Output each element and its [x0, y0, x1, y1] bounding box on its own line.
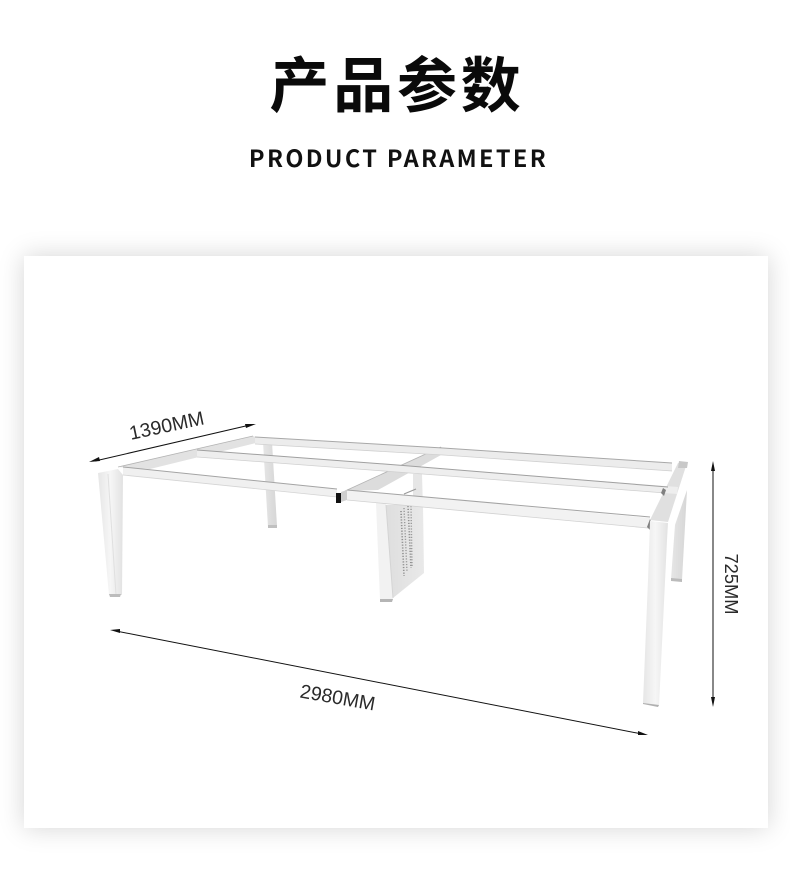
label: 2980MM: 2980MM	[298, 681, 377, 716]
icon: center support with perforated panel	[376, 474, 424, 602]
panel: product dimensions	[24, 256, 768, 828]
icon: back right leg	[671, 490, 687, 582]
icon: front right leg	[643, 521, 668, 707]
title: 产品参数	[269, 38, 525, 125]
icon: back rail	[255, 437, 672, 471]
icon: side rails	[118, 436, 688, 522]
icon: front left leg	[98, 469, 123, 597]
label: 725MM: 725MM	[721, 554, 742, 614]
icon: black connector clip	[336, 490, 347, 503]
arrow: height 725MM	[711, 461, 715, 707]
icon: back left leg	[263, 442, 277, 528]
label: 1390MM: 1390MM	[127, 407, 206, 445]
arrow: length 2980MM	[110, 629, 648, 735]
icon: middle rail	[197, 450, 678, 496]
icon: front rail	[123, 467, 652, 530]
arrow: width 1390MM	[89, 424, 256, 462]
subtitle: PRODUCT PARAMETER	[249, 140, 548, 174]
